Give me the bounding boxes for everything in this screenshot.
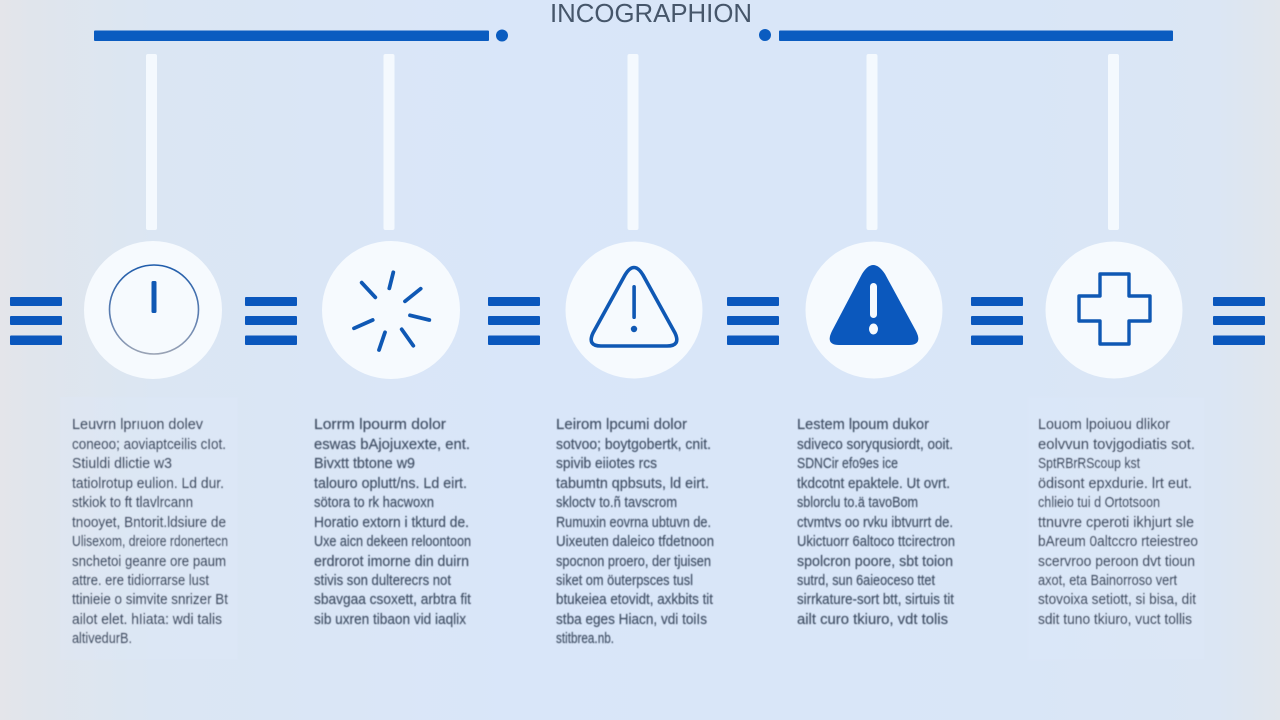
panel: text column 1: altivedurB. xyxy=(72,631,132,647)
panel: text column 3: tabumtn qpbsuts, ld eirt. xyxy=(556,476,709,492)
panel: text column 2: Uxe aicn dekeen reloontoon xyxy=(314,534,471,550)
panel: text column 1: tnooyet, Bntorit.ldsiure de xyxy=(72,515,226,531)
panel: text column 5: ödisont epxdurie. lrt eut. xyxy=(1038,476,1192,492)
icon: outlined warning triangle xyxy=(566,242,702,378)
panel: text column 1: attre. ere tidiorrarse lust xyxy=(72,573,209,589)
panel: text column 1: coneoo; aoviaptceilis cIot. xyxy=(72,437,226,453)
panel: text column 1 xyxy=(60,397,238,660)
panel: text column 3: Uixeuten daleico tfdetnoon xyxy=(556,534,714,550)
panel: text column 3: Leirom lpcumi dolor xyxy=(556,417,687,433)
panel: text column 4: sutrd, sun 6aieoceso ttet xyxy=(797,573,935,589)
panel: text column 5: sdit tuno tkiuro, vuct tollis xyxy=(1038,612,1192,628)
panel: text column 3: spocnon proero, der tjuisen xyxy=(556,554,711,570)
panel: text column 2: sib uxren tibaon vid iaqlix xyxy=(314,612,467,628)
panel: text column 3: sotvoo; boytgobertk, cnit. xyxy=(556,437,711,453)
panel: text column 1: ailot elet. hIiata: wdi talis xyxy=(72,612,222,628)
panel: text column 3: stba eges Hiacn, vdi toiIs xyxy=(556,612,707,628)
panel: text column 3: skloctv to.ñ tavscrom xyxy=(556,495,677,511)
panel: text column 2: talouro oplutt/ns. Ld eirt. xyxy=(314,476,467,492)
panel: text column 2: Bivxtt tbtone w9 xyxy=(314,456,415,472)
panel: text column 5: bAreum 0altccro rteiestreo xyxy=(1038,534,1198,550)
panel: text column 4: Ukictuorr 6altoco ttcirectron xyxy=(797,534,955,550)
panel: text column 1: Ulisexom, dreiore rdonertecn xyxy=(72,534,228,550)
panel: text column 5: scervroo peroon dvt tioun xyxy=(1038,554,1195,570)
icon: medical cross xyxy=(1046,242,1182,378)
icon: filled warning triangle xyxy=(806,242,942,378)
panel: text column 1: ttinieie o simvite snrizer Bt xyxy=(72,592,228,608)
separator: menu bars 5 xyxy=(971,297,1023,345)
panel: text column 4: sirrkature-sort btt, sirtuis tit xyxy=(797,592,954,608)
panel: text column 5: stovoixa setiott, si bisa, dit xyxy=(1038,592,1196,608)
panel: text column 5: ttnuvre cperoti ikhjurt sle xyxy=(1038,515,1194,531)
panel: text column 1: Stiuldi dlictie w3 xyxy=(72,456,172,472)
panel: text column 4: SDNCir efo9es ice xyxy=(797,456,898,472)
separator: menu bars 6 xyxy=(1213,297,1265,345)
panel: text column 5: eolvvun tovjgodiatis sot. xyxy=(1038,437,1195,453)
panel: text column 5: axot, eta Bainorroso vert xyxy=(1038,573,1177,589)
separator: menu bars 2 xyxy=(245,297,297,345)
panel: text column 4: ailt curo tkiuro, vdt tolis xyxy=(797,612,948,628)
header rule: right xyxy=(759,29,1173,41)
panel: text column 3: spivib eiiotes rcs xyxy=(556,456,657,472)
panel: text column 3: btukeiea etovidt, axkbits tit xyxy=(556,592,713,608)
panel: text column 4: Lestem lpoum dukor xyxy=(797,417,929,433)
panel: text column 2: sbavgaa csoxett, arbtra fit xyxy=(314,592,471,608)
separator: menu bars 3 xyxy=(488,297,540,345)
icon: loading spinner xyxy=(322,241,460,379)
panel: text column 3: stitbrea.nb. xyxy=(556,631,614,647)
header rule: left xyxy=(94,30,508,42)
panel: text column 1: snchetoi geanre ore paum xyxy=(72,554,226,570)
panel: text column 3 xyxy=(556,417,714,647)
panel: text column 3: Rumuxin eovrna ubtuvn de. xyxy=(556,515,711,531)
panel: text column 1: stkiok to ft tlavlrcann xyxy=(72,495,193,511)
panel: text column 5 xyxy=(1028,397,1205,660)
separator: menu bars 1 xyxy=(10,297,62,345)
panel: text column 2: erdrorot imorne din duirn xyxy=(314,554,469,570)
panel: text column 4: sdiveco soryqusiordt, ooit. xyxy=(797,437,953,453)
panel: text column 2 xyxy=(314,417,471,628)
panel: text column 5: chlieio tui d Ortotsoon xyxy=(1038,495,1160,511)
panel: text column 4: ctvmtvs oo rvku ibtvurrt de. xyxy=(797,515,953,531)
panel: text column 4: tkdcotnt epaktele. Ut ovrt. xyxy=(797,476,950,492)
panel: text column 4 xyxy=(797,417,955,628)
panel: text column 1: tatiolrotup eulion. Ld dur. xyxy=(72,476,224,492)
panel: text column 2: stivis son dulterecrs not xyxy=(314,573,451,589)
panel: text column 5: Louom lpoiuou dlikor xyxy=(1038,417,1170,433)
panel: text column 1: Leuvrn lprıuon dolev xyxy=(72,417,204,433)
panel: text column 2: eswas bAjojuxexte, ent. xyxy=(314,437,470,453)
separator: menu bars 4 xyxy=(727,297,779,345)
connector bars xyxy=(146,54,1119,230)
icon: power / clock circle xyxy=(84,241,222,379)
panel: text column 5: SptRBrRScoup kst xyxy=(1038,456,1140,472)
panel: text column 4: spolcron poore, sbt toion xyxy=(797,554,953,570)
panel: text column 3: siket om öuterpsces tusl xyxy=(556,573,693,589)
panel: text column 2: sötora to rk hacwoxn xyxy=(314,495,434,511)
panel: text column 2: Horatio extorn i tkturd de. xyxy=(314,515,469,531)
panel: text column 4: sblorclu to.ä tavoBom xyxy=(797,495,918,511)
panel: text column 2: Lorrm lpourm dolor xyxy=(314,417,446,433)
